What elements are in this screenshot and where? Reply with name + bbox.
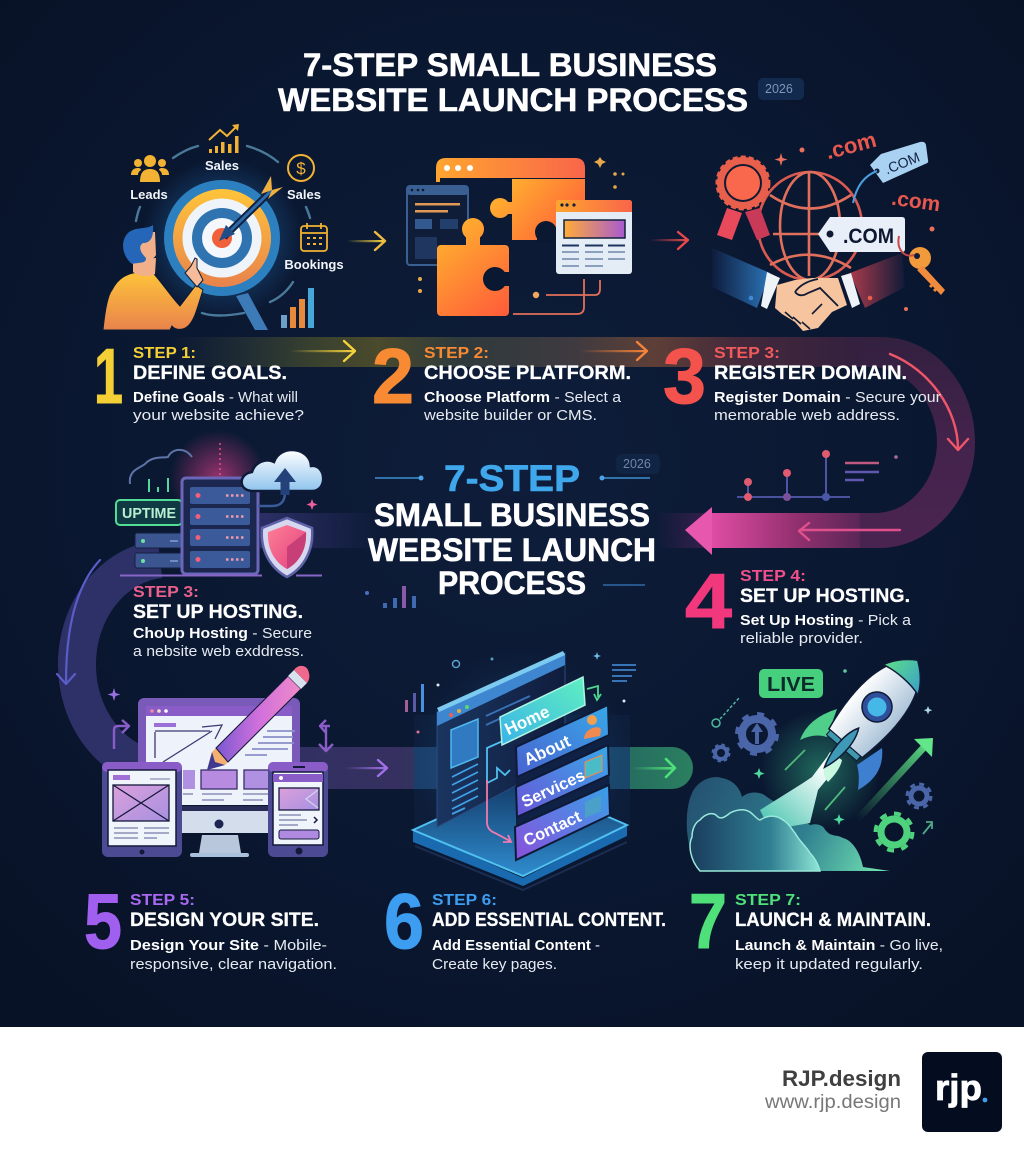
step 5 text	[84, 877, 337, 973]
icon: people	[131, 155, 169, 182]
step 5 heading: DESIGN YOUR SITE.	[130, 910, 319, 931]
nav button: home: Home	[502, 702, 553, 739]
flow path: lower band from hosting to launch	[77, 513, 693, 789]
puzzle piece lower	[437, 218, 510, 316]
baseline	[120, 574, 322, 576]
rocket body	[804, 643, 938, 785]
step 1 body: Define Goals - What will	[133, 390, 298, 406]
centre year badge: 2026	[623, 457, 651, 471]
step 3 body	[714, 390, 941, 424]
nav panel backing	[516, 705, 610, 860]
step 7 body: Launch & Maintain - Go live,	[735, 938, 943, 954]
centre title: 7-step: 7-STEP	[444, 458, 580, 499]
arrow: goals to platform	[290, 341, 355, 361]
step 2 heading: CHOOSE PLATFORM.	[424, 363, 631, 384]
centre year badge	[616, 454, 660, 474]
centre title: name: WEBSITE LAUNCH	[368, 532, 656, 568]
main title: 7-STEP SMALL BUSINESS	[303, 47, 717, 83]
illustration: step 7 launch rocket	[687, 643, 938, 871]
arrow: platform illustration to domain illustration	[650, 232, 688, 249]
step 6 body: Add Essential Content -	[432, 938, 600, 954]
number 2: 2	[372, 332, 414, 420]
caption body: a nebsite web exddress.	[133, 644, 304, 660]
step 6 text	[384, 877, 666, 973]
step 4 body	[740, 613, 912, 647]
launch badge: LIVE	[767, 674, 815, 696]
nav button: about: About	[521, 731, 574, 769]
sparkles and dots	[418, 157, 624, 293]
number 4: 4	[685, 557, 732, 645]
isometric browser window	[437, 651, 565, 827]
caption heading: SET UP HOSTING.	[133, 602, 303, 623]
step 1 text	[94, 332, 304, 424]
person pointing	[103, 225, 203, 330]
caption label: STEP 3:	[133, 584, 199, 601]
step 7 body	[735, 938, 943, 973]
dashed goal orbit	[136, 146, 310, 316]
monitor	[138, 698, 300, 857]
step 2 body	[423, 390, 622, 424]
centre title: name: PROCESS	[438, 565, 586, 601]
right browser window	[556, 200, 632, 274]
arrow: lower curve toward centre	[799, 523, 900, 540]
icon: dollar coin: $	[296, 159, 306, 178]
step 4 text	[685, 557, 912, 647]
hands	[775, 278, 847, 331]
illustration: step 4 hosting servers	[116, 430, 323, 577]
small code window	[407, 186, 468, 265]
uptime badge	[116, 500, 182, 525]
blue .com tag: .COM	[882, 149, 922, 177]
main title	[278, 47, 748, 118]
step 4 body: reliable provider.	[740, 631, 863, 647]
nav button: services	[516, 745, 609, 817]
caption body	[133, 626, 312, 660]
text: .com top: .com	[823, 127, 879, 164]
wireframe globe	[758, 172, 862, 280]
growth arrow	[857, 738, 933, 820]
step 4 label: STEP 4:	[740, 568, 806, 585]
step 1 body: your website achieve?	[133, 408, 304, 424]
step 3 body: memorable web address.	[714, 408, 900, 424]
label: sales right: Sales	[287, 187, 321, 202]
step 5 label: STEP 5:	[130, 892, 195, 909]
footer url: www.rjp.design	[764, 1092, 901, 1113]
icon: rising chart	[209, 124, 239, 153]
target stand	[236, 293, 268, 330]
icon: dollar coin	[288, 155, 314, 181]
puzzle piece upper	[490, 179, 585, 243]
arrow: content to launch	[632, 759, 675, 777]
arrow: platform to domain	[580, 342, 647, 360]
small server units	[135, 533, 182, 568]
signal dotted line	[219, 443, 221, 476]
white .com tag	[818, 217, 905, 252]
gears	[712, 714, 931, 850]
arrow: goals illustration to platform illustration	[347, 232, 385, 250]
step 3 text	[663, 332, 941, 424]
launch badge	[759, 669, 823, 698]
step 6 heading: ADD ESSENTIAL CONTENT.	[432, 910, 666, 931]
connector lines	[513, 279, 600, 314]
ribbon rosette	[717, 157, 770, 240]
hosting caption text	[133, 584, 312, 660]
pink glow	[170, 430, 266, 526]
main title: WEBSITE LAUNCH PROCESS	[278, 82, 748, 118]
centre title: name	[368, 497, 656, 601]
nav button: services: Services	[519, 766, 588, 811]
arrow: curve down toward step 5	[57, 560, 100, 684]
step 3 heading: REGISTER DOMAIN.	[714, 363, 907, 384]
step 2 body: website builder or CMS.	[423, 408, 597, 424]
number 3: 3	[663, 332, 706, 420]
nav button: contact	[515, 785, 610, 860]
centre title: name: SMALL BUSINESS	[374, 497, 650, 533]
step 3 body: Register Domain - Secure your	[714, 390, 941, 406]
centre title block	[365, 454, 660, 608]
cloud upload	[242, 450, 323, 506]
key	[898, 236, 945, 295]
phone	[268, 762, 328, 857]
white .com tag: .COM	[843, 225, 894, 248]
arrow: curve down toward step 4	[890, 354, 968, 450]
flow path: upper band from step 1 to step 4	[170, 337, 975, 555]
step 3 label: STEP 3:	[714, 345, 780, 362]
number 5: 5	[84, 877, 122, 965]
nav button: home	[500, 677, 585, 745]
rocket fins	[800, 709, 882, 790]
pencil	[207, 666, 309, 770]
step 2 body: Choose Platform - Select a	[424, 390, 622, 406]
step 1 body	[133, 390, 304, 424]
arrow: design to content	[345, 760, 387, 776]
caption body: ChoUp Hosting - Secure	[133, 626, 312, 642]
nav button: about	[516, 705, 609, 777]
blue .com tag	[853, 142, 928, 203]
security shield	[262, 518, 312, 577]
footer logo: rjp	[935, 1067, 982, 1108]
footer logo	[922, 1052, 1002, 1132]
green signal bars	[149, 478, 168, 492]
sparkles	[774, 148, 934, 311]
translucent glass panel	[414, 715, 630, 830]
connectors	[487, 686, 601, 842]
footer	[0, 1027, 1024, 1154]
number 7: 7	[689, 877, 727, 965]
label: leads: Leads	[130, 187, 168, 202]
step 6 label: STEP 6:	[432, 892, 497, 909]
text: .com right: .com	[890, 187, 942, 216]
cloud outline left	[130, 450, 192, 484]
target glow	[142, 158, 302, 318]
large window	[436, 158, 585, 182]
icon: calendar	[301, 223, 327, 251]
step 7 heading: LAUNCH & MAINTAIN.	[735, 910, 931, 931]
step 7 body: keep it updated regularly.	[735, 957, 923, 973]
small floating marks	[405, 652, 636, 734]
step 7 text	[689, 877, 943, 973]
step 2 label: STEP 2:	[424, 345, 489, 362]
step 2 text	[372, 332, 631, 424]
title accent lines	[375, 476, 650, 585]
small bars chart	[365, 586, 416, 608]
smoke cloud	[687, 757, 890, 871]
step 6 body: Create key pages.	[432, 957, 557, 973]
label: bookings: Bookings	[284, 257, 344, 272]
step 7 label: STEP 7:	[735, 892, 801, 909]
bullseye	[164, 180, 280, 296]
year badge: 2026	[765, 82, 793, 96]
arrow in target	[219, 176, 283, 241]
rocket glow	[760, 710, 880, 830]
tablet	[102, 762, 182, 857]
sparkle	[108, 688, 120, 701]
decorative timeline chart	[737, 450, 898, 501]
number 6: 6	[384, 877, 424, 965]
step 1 heading: DEFINE GOALS.	[133, 363, 287, 384]
platform glow	[410, 650, 630, 870]
step 5 body	[130, 938, 337, 973]
step 6 body	[432, 938, 600, 973]
illustration: step 5 responsive design	[102, 666, 333, 857]
illustration: step 3 domain globe and handshake	[712, 127, 945, 331]
footer brand name: RJP.design	[782, 1066, 901, 1091]
year badge	[758, 78, 804, 100]
small marks	[712, 669, 932, 834]
isometric platform	[413, 780, 627, 890]
step 1 label: STEP 1:	[133, 345, 196, 362]
server tower	[182, 478, 258, 574]
step 4 heading: SET UP HOSTING.	[740, 586, 910, 607]
pink sparkle	[306, 499, 318, 510]
uptime badge: UPTIME	[122, 506, 176, 522]
step 5 body: responsive, clear navigation.	[130, 957, 337, 973]
step 4 body: Set Up Hosting - Pick a	[740, 613, 912, 629]
illustration: step 6 site content pages	[405, 650, 636, 890]
step 5 body: Design Your Site - Mobile-	[130, 938, 327, 954]
nav button: contact: Contact	[521, 808, 585, 850]
label: sales top: Sales	[205, 158, 239, 173]
illustration: step 2 platform puzzle	[407, 157, 632, 316]
handshake sleeves	[712, 248, 905, 309]
responsive arrows	[114, 720, 333, 751]
number 1: 1	[94, 332, 123, 420]
icon: bar chart	[281, 288, 314, 328]
illustration: step 1 goals target	[103, 124, 344, 330]
